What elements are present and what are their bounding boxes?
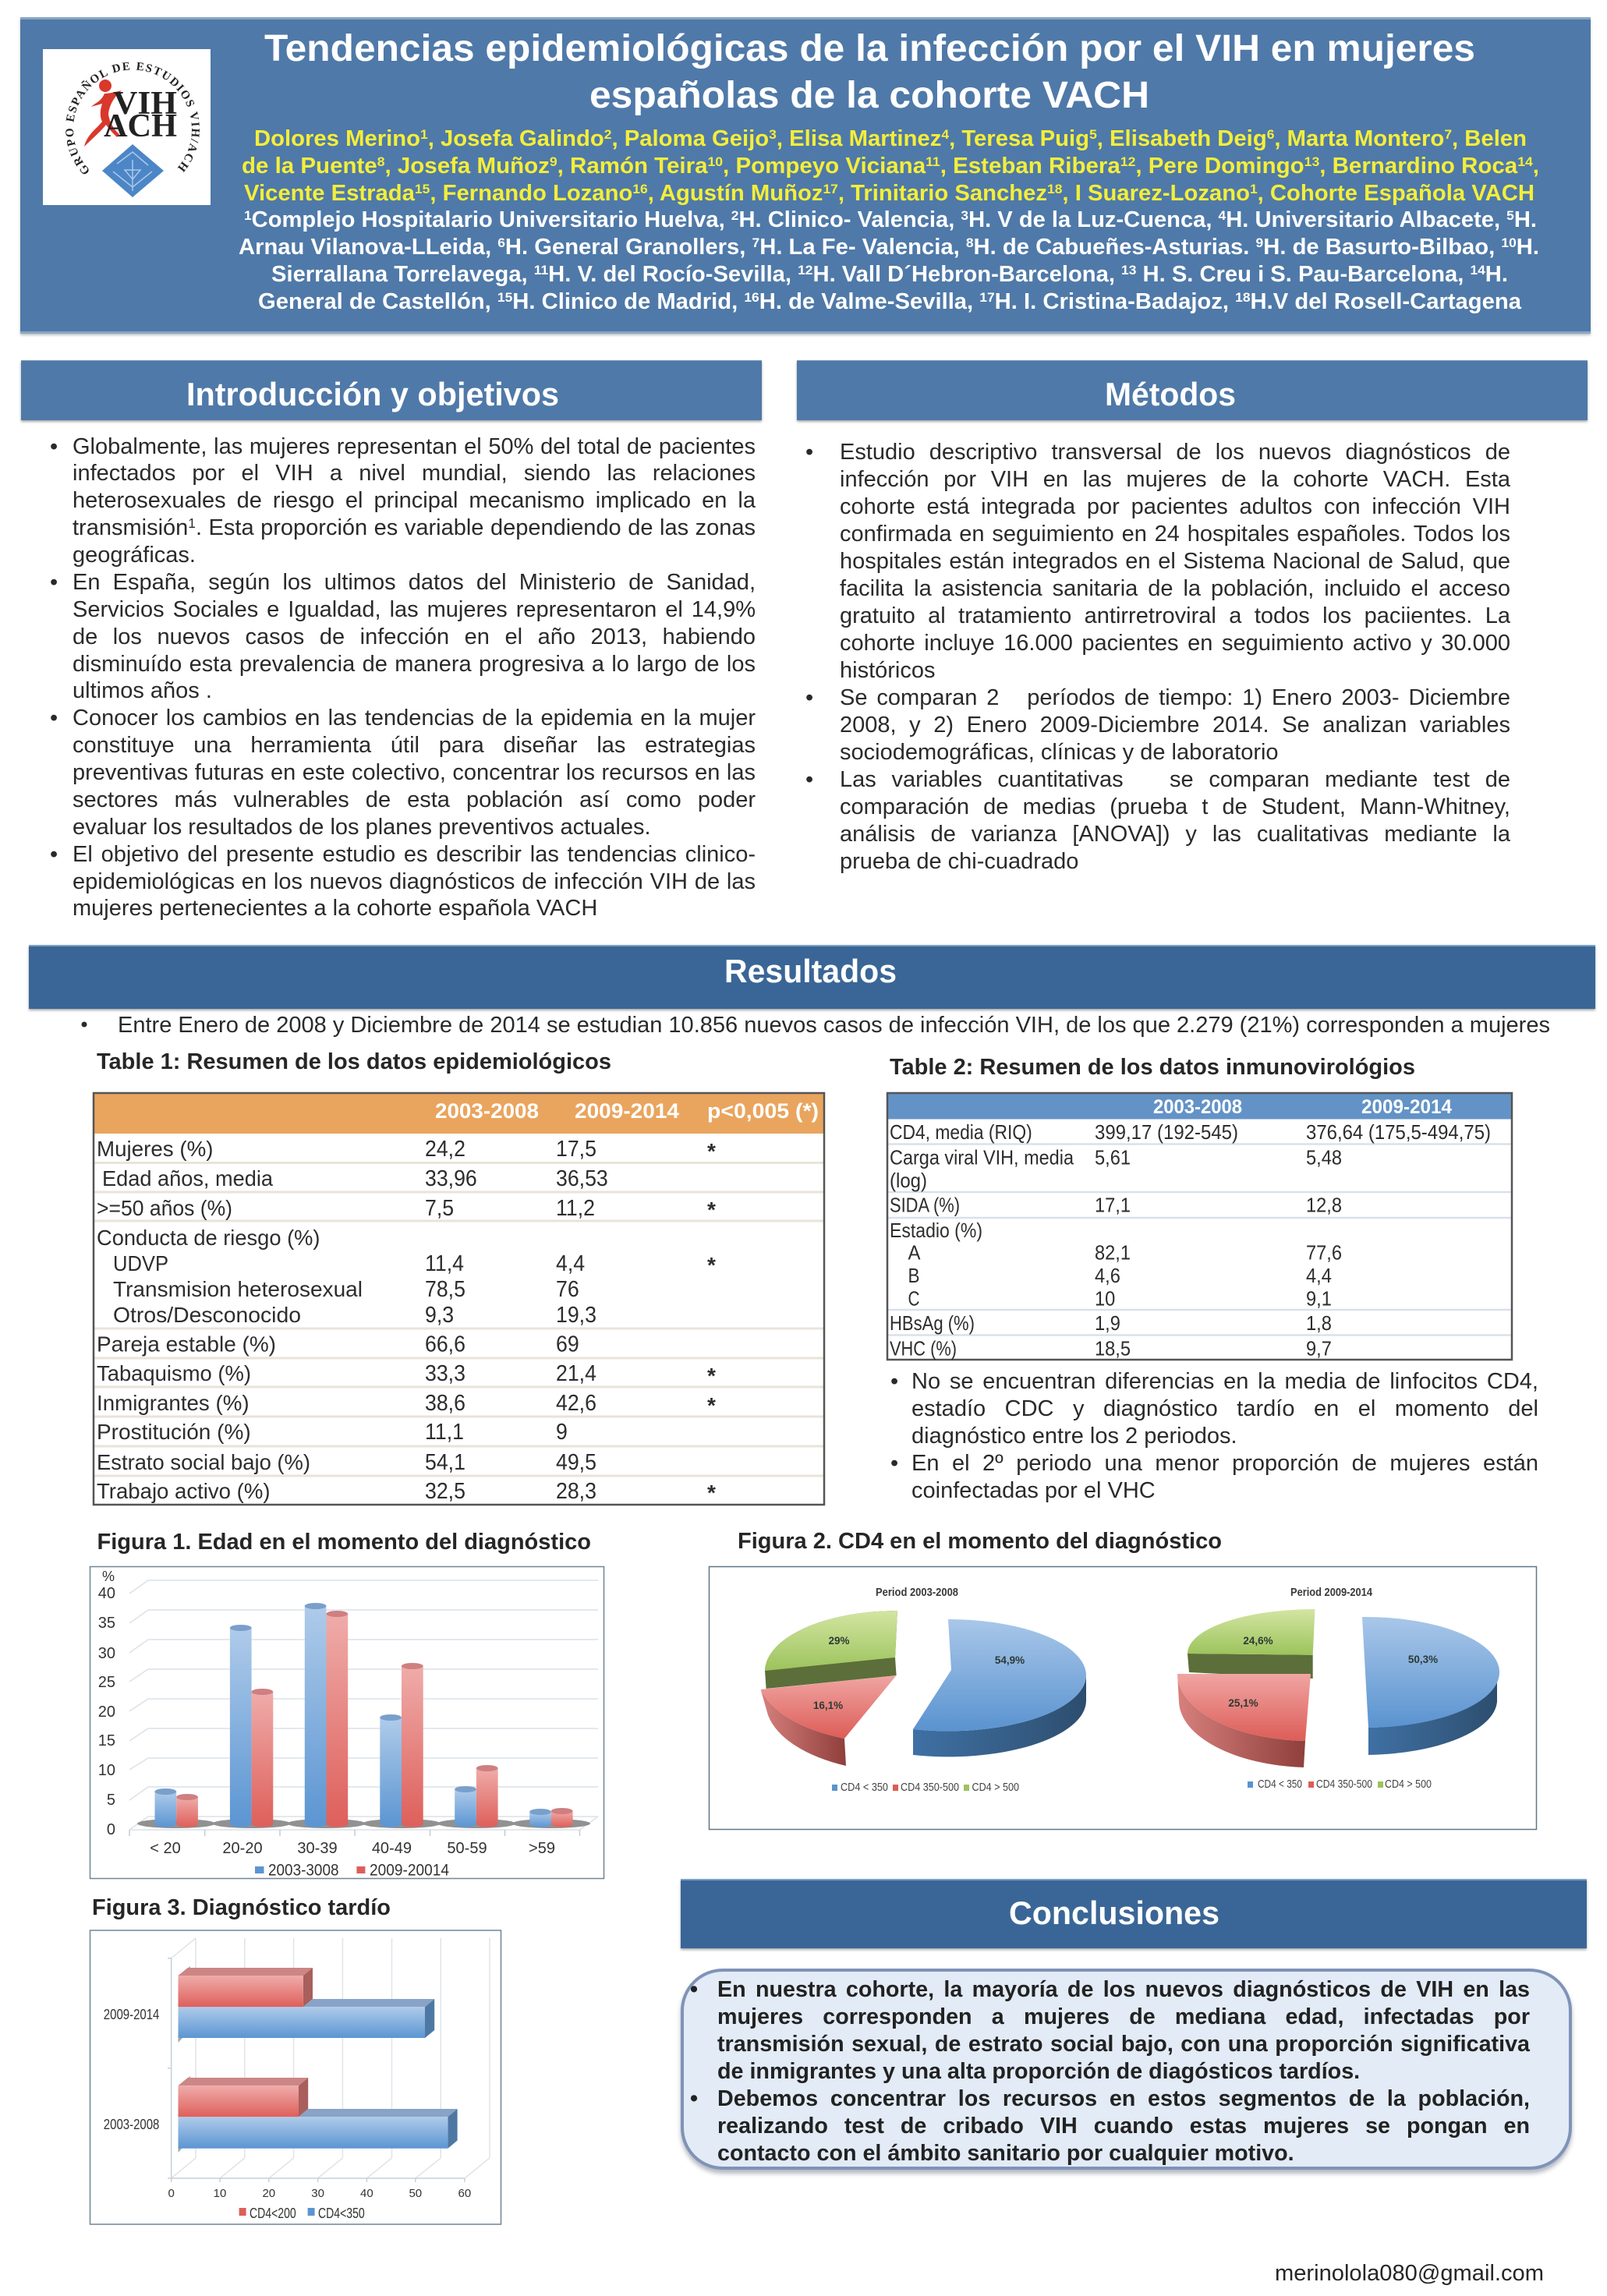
authors: , Josefa Galindo <box>428 126 604 151</box>
table 1: 11,2 <box>556 1195 595 1220</box>
pie: period 2009-2014: CD4 350-500 <box>1316 1778 1372 1791</box>
authors: , Trinitario Sanchez <box>838 181 1047 206</box>
authors: , Paloma Geijo <box>612 126 769 151</box>
affiliations: 12 <box>798 263 813 278</box>
table 2: 399,17 (192-545) <box>1095 1120 1238 1144</box>
title: españolas de la cohorte VACH <box>589 75 1149 116</box>
pie: period 2009-2014: CD4 > 500 <box>1385 1778 1432 1791</box>
text block: conclusiones: de inmigrantes y una alta proporción de diagósticos tardíos. <box>717 2059 1360 2084</box>
authors: , Josefa Muñoz <box>385 154 550 179</box>
table 1: Trabajo activo (%) <box>97 1479 270 1503</box>
table 1: Estrato social bajo (%) <box>97 1450 310 1474</box>
table 2: C <box>908 1287 920 1311</box>
table 2: 9,7 <box>1306 1339 1332 1360</box>
table 1: 33,96 <box>425 1166 477 1190</box>
figure 3 title: Figura 3. Diagnóstico tardío <box>92 1895 391 1920</box>
text: resultados intro: Entre Enero de 2008 y Diciembre de 2014 se estudian 10.856 nuevos casos de infección VIH, de los que 2.279 (21%) corresponden a mujeres <box>118 1013 1550 1038</box>
header panel <box>20 17 1591 334</box>
authors: , Elisa Martinez <box>777 126 941 151</box>
affiliations: H. <box>1517 235 1539 260</box>
affiliations: 5 <box>1506 208 1514 223</box>
axis labels: % <box>102 1569 115 1584</box>
figure 3: horizontal bar chart <box>89 1895 502 2225</box>
table 2: 82,1 <box>1095 1243 1131 1265</box>
table 1 <box>92 1049 825 1506</box>
table 1: Edad años, media <box>102 1166 273 1190</box>
table 2: CD4, media (RIQ) <box>890 1120 1032 1144</box>
table 1: 9 <box>556 1419 568 1444</box>
table 1: Otros/Desconocido <box>113 1303 301 1327</box>
pie: period 2009-2014 <box>1177 1586 1499 1791</box>
figure 1 title: Figura 1. Edad en el momento del diagnóstico <box>97 1530 591 1555</box>
affiliations: 9 <box>1256 235 1263 250</box>
table 2: A <box>908 1241 921 1265</box>
table 1: 4,4 <box>556 1251 585 1275</box>
heading: Resultados: Resultados <box>724 953 897 989</box>
text block: introducción: El objetivo del presente estudio es describir las tendencias clinico- <box>73 842 756 867</box>
affiliations: 6 <box>497 235 505 250</box>
table 1: 66,6 <box>425 1331 465 1357</box>
table 1: 54,1 <box>425 1449 465 1474</box>
table 1: * <box>707 1253 716 1277</box>
text block: introducción: sectores más vulnerables de esta población así como poder <box>73 787 756 812</box>
authors: , Fernando Lozano <box>430 181 632 206</box>
text block: introducción: evaluar los resultados de los planes preventivos actuales. <box>73 815 651 840</box>
text block: conclusiones: realizando test de cribado VIH cuando estas mujeres se pongan en <box>717 2114 1530 2139</box>
authors: 8 <box>377 154 385 169</box>
text block: métodos: hospitales están integrados en el Sistema Nacional de Salud, que <box>840 549 1510 574</box>
logo: GRUPO ESPAÑOL DE ESTUDIOS VIH/ACH <box>65 62 200 175</box>
axis labels: < 20 <box>150 1840 181 1857</box>
text block: introducción: Conocer los cambios en las tendencias de la epidemia en la mujer <box>73 706 756 731</box>
bars 2003-2008 <box>154 1603 551 1827</box>
text block: introducción: de los nuevos casos de infección en el año 2013, habiendo <box>73 624 756 649</box>
pie: period 2003-2008: Period 2003-2008 <box>876 1586 958 1599</box>
axis labels: 35 <box>98 1615 115 1632</box>
text block: introducción: heterosexuales de riesgo el principal mecanismo implicado en la <box>73 488 756 513</box>
table 1: Inmigrantes (%) <box>97 1391 250 1415</box>
table 2: 4,6 <box>1095 1265 1120 1287</box>
heading: Conclusiones: Conclusiones <box>1009 1894 1219 1931</box>
axis labels: 0 <box>107 1821 115 1838</box>
text block: métodos: análisis de varianza [ANOVA]) y las cualitativas mediante la <box>840 822 1510 847</box>
table 1: Conducta de riesgo (%) <box>97 1226 320 1250</box>
affiliations: 13 <box>1121 263 1136 278</box>
text block: introducción: epidemiológicas en los nuevos diagnósticos de infección VIH de las <box>73 869 756 893</box>
affiliations: H. General Granollers, <box>505 235 752 260</box>
table 2: 5,48 <box>1306 1148 1342 1169</box>
axis labels: 30 <box>311 2187 324 2200</box>
table 1: 21,4 <box>556 1360 596 1385</box>
table 1: >=50 años (%) <box>97 1196 232 1220</box>
text block: métodos: sociodemográficas, clínicas y de laboratorio <box>840 739 1279 764</box>
bars period 2003-2008 <box>178 2076 458 2153</box>
affiliations: H. <box>1514 207 1537 232</box>
affiliations: 1 <box>244 208 252 223</box>
text block: introducción: ultimos años . <box>73 678 212 703</box>
pie: period 2003-2008 <box>761 1586 1086 1794</box>
authors: , <box>1533 154 1539 179</box>
authors: 18 <box>1047 182 1062 196</box>
figure 2 title: Figura 2. CD4 en el momento del diagnóstico <box>738 1529 1222 1554</box>
text block: table 2 findings: diagnóstico entre los 2 periodos. <box>911 1424 1237 1449</box>
authors: 11 <box>926 154 940 169</box>
text block: conclusiones: En nuestra cohorte, la mayoría de los nuevos diagnósticos de VIH en las <box>717 1977 1530 2002</box>
figure 2: pie charts <box>708 1529 1538 1831</box>
text block: introducción: transmisión1. Esta proporción es variable dependiendo de las zonas <box>73 515 756 540</box>
affiliations: H. de Cabueñes-Asturias. <box>974 235 1256 260</box>
affiliations: H. La Fe- Valencia, <box>759 235 966 260</box>
affiliations: H. Clinico- Valencia, <box>738 207 961 232</box>
table 1: 11,1 <box>425 1419 464 1444</box>
text block: métodos: facilita la asistencia sanitaria de la población, incluido el acceso <box>840 575 1510 600</box>
affiliations: 2 <box>731 208 738 223</box>
authors: de la Puente <box>242 154 373 179</box>
affiliations: H. Vall D´Hebron-Barcelona, <box>813 262 1121 287</box>
authors: Vicente Estrada <box>244 181 410 206</box>
table 1: * <box>707 1481 716 1505</box>
pie: period 2009-2014: Period 2009-2014 <box>1290 1586 1373 1599</box>
pie: period 2003-2008: 29% <box>828 1635 850 1647</box>
authors: , Teresa Puig <box>949 126 1089 151</box>
text block: métodos: históricos <box>840 658 936 683</box>
authors: , Agustín Muñoz <box>648 181 823 206</box>
text block: métodos: gratuito al tratamiento antirretroviral a todos los paciientes. La <box>840 603 1510 628</box>
legend <box>255 1862 449 1880</box>
table 2: 2009-2014 <box>1361 1096 1452 1118</box>
pie: period 2009-2014: 25,1% <box>1228 1697 1258 1709</box>
authors: , Elisabeth Deig <box>1097 126 1267 151</box>
heading: Resultados <box>29 945 1595 1009</box>
axis labels: 40 <box>98 1585 115 1602</box>
table 1: Transmision heterosexual <box>113 1277 363 1301</box>
text block: conclusiones <box>691 1977 1530 2166</box>
pie: period 2003-2008: 16,1% <box>813 1700 843 1711</box>
axis labels: 20-20 <box>222 1840 263 1857</box>
authors: 13 <box>1304 154 1319 169</box>
table 1: 78,5 <box>425 1276 465 1301</box>
text block: table 2 findings: No se encuentran diferencias en la media de linfocitos CD4, <box>911 1369 1538 1394</box>
text block: métodos: cohorte está integrada por pacientes adultos con infección VIH <box>840 494 1510 519</box>
table 2: (log) <box>890 1169 927 1192</box>
table 2: VHC (%) <box>890 1336 957 1360</box>
table 1: Tabaquismo (%) <box>97 1361 251 1385</box>
axis labels: 10 <box>98 1762 115 1779</box>
axis labels: 25 <box>98 1674 115 1691</box>
affiliations: 14 <box>1470 263 1485 278</box>
affiliations: 8 <box>966 235 974 250</box>
affiliations: H. I. Cristina-Badajoz, <box>995 289 1235 314</box>
pie: period 2009-2014: 24,6% <box>1243 1635 1273 1647</box>
authors: 12 <box>1120 154 1135 169</box>
heading: Introducción y objetivos <box>21 360 762 420</box>
authors: 6 <box>1267 127 1274 142</box>
affiliations: H. <box>1485 262 1508 287</box>
text block: métodos: prueba de chi-cuadrado <box>840 848 1078 873</box>
affiliations: 4 <box>1219 208 1226 223</box>
table 1: 7,5 <box>425 1195 454 1220</box>
axis labels: 60 <box>458 2187 471 2200</box>
table 1: 24,2 <box>425 1136 465 1161</box>
text block: introducción: Servicios Sociales e Igualdad, las mujeres representaron el 14,9% <box>73 597 756 622</box>
table 1: 2003-2008 <box>435 1099 539 1123</box>
title: Tendencias epidemiológicas de la infección por el VIH en mujeres <box>264 28 1475 69</box>
text block: conclusiones: contacto con el ámbito sanitario por cualquier motivo. <box>717 2141 1294 2166</box>
affiliations: 11 <box>534 263 548 278</box>
text block: introducción <box>51 433 756 921</box>
heading: Métodos: Métodos <box>1105 376 1236 412</box>
table 1: 19,3 <box>556 1302 596 1327</box>
table 2 <box>886 1055 1513 1361</box>
affiliations: 17 <box>979 290 995 305</box>
table 1: Mujeres (%) <box>97 1137 214 1161</box>
axis labels: 2003-2008 <box>104 2117 159 2132</box>
pie: period 2009-2014: 50,3% <box>1408 1654 1438 1665</box>
table 2: SIDA (%) <box>890 1194 960 1217</box>
table 1: 33,3 <box>425 1360 465 1385</box>
axis labels: 5 <box>107 1792 115 1809</box>
text block: métodos: 2008, y 2) Enero 2009-Diciembre 2014. Se analizan variables <box>840 713 1510 738</box>
text block: table 2 findings: estadío CDC y diagnóstico tardío en el momento del <box>911 1396 1538 1420</box>
affiliations: Arnau Vilanova-LLeida, <box>239 235 485 260</box>
header text <box>239 28 1539 314</box>
axis labels: 40 <box>360 2187 373 2200</box>
text block: introducción: infectados por el VIH a nivel mundial, siendo las relaciones <box>73 461 756 486</box>
text block: introducción: mujeres pertenecientes a la cohorte española VACH <box>73 896 597 921</box>
authors: , Pere Domingo <box>1135 154 1304 179</box>
text block: métodos: Las variables cuantitativas se comparan mediante test de <box>840 767 1510 792</box>
table 2: 5,61 <box>1095 1148 1131 1169</box>
axis labels: 20 <box>98 1703 115 1721</box>
table 2: 1,8 <box>1306 1313 1332 1335</box>
authors: 5 <box>1089 127 1097 142</box>
table 1: 38,6 <box>425 1390 465 1415</box>
affiliations: Complejo Hospitalario Universitario Huelva, <box>252 207 731 232</box>
authors: 1 <box>1250 182 1258 196</box>
authors: 1 <box>420 127 428 142</box>
table 2: 1,9 <box>1095 1313 1120 1335</box>
table 1: 17,5 <box>556 1136 596 1161</box>
text block: métodos: confirmada en seguimiento en 24 hospitales españoles. Todos los <box>840 521 1510 546</box>
axis labels <box>98 1569 555 1857</box>
affiliations: Sierrallana Torrelavega, <box>271 262 522 287</box>
affiliations: General de Castellón, <box>258 289 485 314</box>
table 1: * <box>707 1198 716 1222</box>
table 2: 4,4 <box>1306 1265 1332 1287</box>
text block: métodos: cohorte incluye 16.000 pacientes en seguimiento activo y 30.000 <box>840 630 1510 655</box>
legend: CD4<350 <box>318 2206 365 2221</box>
authors: , Bernardino Roca <box>1319 154 1518 179</box>
affiliations <box>239 207 1539 314</box>
affiliations: 3 <box>961 208 968 223</box>
authors: , Belen <box>1452 126 1527 151</box>
logo: ACH <box>104 108 177 144</box>
table 1: 49,5 <box>556 1449 596 1474</box>
bars period 2009-2014 <box>178 1966 434 2043</box>
text block: table 2 findings <box>891 1369 1538 1503</box>
text block: introducción: preventivas futuras en este colectivo, concentrar los recursos en las <box>73 760 756 785</box>
text block: introducción: En España, según los ultimos datos del Ministerio de Sanidad, <box>73 570 756 595</box>
bars 2009-2014 <box>176 1611 573 1827</box>
legend: CD4<200 <box>250 2206 296 2221</box>
authors: , Esteban Ribera <box>940 154 1121 179</box>
authors: 15 <box>415 182 430 196</box>
affiliations: H. de Basurto-Bilbao, <box>1263 235 1501 260</box>
affiliations: H. Clinico de Madrid, <box>512 289 744 314</box>
figure 1: bar chart <box>89 1530 605 1880</box>
text block: introducción: geográficas. <box>73 543 196 568</box>
table 1: 9,3 <box>425 1302 454 1327</box>
axis labels: 2009-2014 <box>104 2007 159 2022</box>
affiliations: 7 <box>752 235 759 250</box>
authors: 10 <box>707 154 723 169</box>
table 2: 2003-2008 <box>1153 1096 1242 1118</box>
table 2: 17,1 <box>1095 1195 1131 1217</box>
table 2: 10 <box>1095 1289 1115 1311</box>
affiliations: H. de Valme-Sevilla, <box>759 289 979 314</box>
table 1: * <box>707 1364 716 1388</box>
text block: métodos: comparación de medias (prueba t de Student, Mann-Whitney, <box>840 794 1510 819</box>
axis labels: 50-59 <box>447 1840 487 1857</box>
authors: 9 <box>550 154 557 169</box>
pie: period 2003-2008: 54,9% <box>995 1654 1025 1666</box>
affiliations: H.V del Rosell-Cartagena <box>1251 289 1522 314</box>
text block: table 2 findings: coinfectadas por el VHC <box>911 1478 1156 1503</box>
heading: Métodos <box>797 360 1588 420</box>
title <box>264 28 1475 116</box>
axis labels: 40-49 <box>372 1840 412 1857</box>
authors: , Ramón Teira <box>557 154 709 179</box>
legend: 2003-3008 <box>268 1862 338 1880</box>
table 1: * <box>707 1393 716 1417</box>
heading: Conclusiones <box>681 1879 1587 1948</box>
axis labels: 10 <box>214 2187 226 2200</box>
callout: conclusiones <box>681 1969 1572 2170</box>
axis labels: >59 <box>529 1840 555 1857</box>
base shadows <box>137 1819 590 1828</box>
affiliations: 16 <box>744 290 759 305</box>
table 2: Carga viral VIH, media <box>890 1146 1074 1169</box>
authors: 2 <box>604 127 612 142</box>
text block: métodos: Se comparan 2 períodos de tiempo: 1) Enero 2003- Diciembre <box>840 685 1510 709</box>
table 1: * <box>707 1139 716 1163</box>
text block: introducción: constituye una herramienta útil para diseñar las estrategias <box>73 733 756 758</box>
affiliations: H. S. Creu i S. Pau-Barcelona, <box>1136 262 1470 287</box>
affiliations: 10 <box>1501 235 1517 250</box>
table 2: Estadio (%) <box>890 1219 982 1242</box>
authors: 17 <box>823 182 838 196</box>
axis labels: 20 <box>262 2187 275 2200</box>
text block: conclusiones: mujeres corresponden a mujeres de mediana edad, infectadas por <box>717 2004 1530 2029</box>
axis labels: 50 <box>409 2187 422 2200</box>
table 1: 42,6 <box>556 1390 596 1415</box>
table 2: 18,5 <box>1095 1339 1131 1360</box>
heading: Introducción y objetivos: Introducción y objetivos <box>186 376 559 412</box>
authors: , I Suarez-Lozano <box>1062 181 1250 206</box>
table 2: 9,1 <box>1306 1289 1332 1311</box>
axis labels: 30-39 <box>297 1840 338 1857</box>
table 1: 28,3 <box>556 1478 596 1503</box>
authors: Dolores Merino <box>254 126 416 151</box>
table 2 title: Table 2: Resumen de los datos inmunovirológios <box>890 1055 1415 1080</box>
authors: 7 <box>1444 127 1452 142</box>
authors: 3 <box>769 127 777 142</box>
text block: introducción: Globalmente, las mujeres representan el 50% del total de pacientes <box>73 433 756 458</box>
email: merinolola080@gmail.com <box>1275 2261 1544 2286</box>
authors: 16 <box>632 182 648 196</box>
text block: conclusiones: Debemos concentrar los recursos en estos segmentos de la población, <box>717 2086 1530 2111</box>
axis labels: 0 <box>168 2187 175 2200</box>
text block: métodos <box>806 440 1510 873</box>
table 1: 32,5 <box>425 1478 465 1503</box>
axis labels <box>104 2007 471 2200</box>
authors: 14 <box>1517 154 1533 169</box>
text block: introducción: disminuído esta prevalencia de manera progresiva a lo largo de los <box>73 652 756 677</box>
table 1: 76 <box>556 1276 579 1301</box>
text block: métodos: Estudio descriptivo transversal de los nuevos diagnósticos de <box>840 440 1510 465</box>
table 1: 69 <box>556 1331 579 1357</box>
text block: table 2 findings: En el 2º periodo una menor proporción de mujeres están <box>911 1450 1538 1475</box>
authors: , Cohorte Española VACH <box>1258 181 1534 206</box>
affiliations: 15 <box>497 290 512 305</box>
table 1 title: Table 1: Resumen de los datos epidemiológicos <box>97 1049 611 1074</box>
legend <box>239 2206 365 2221</box>
table 1: 36,53 <box>556 1166 608 1190</box>
pie: period 2009-2014: CD4 < 350 <box>1258 1778 1302 1791</box>
pie: period 2003-2008: CD4 < 350 <box>841 1781 888 1794</box>
logo: VIH <box>113 86 177 122</box>
legend: 2009-20014 <box>370 1862 449 1880</box>
table 1: p<0,005 (*) <box>707 1099 819 1123</box>
text block: conclusiones: transmisión sexual, de estrato social bajo, con una proporción significativa <box>717 2032 1530 2057</box>
authors: , Marta Montero <box>1274 126 1444 151</box>
authors <box>242 126 1539 206</box>
text block: métodos: infección por VIH en las mujeres de la cohorte VACH. Esta <box>840 466 1510 491</box>
affiliations: H. Universitario Albacete, <box>1226 207 1506 232</box>
table 2: HBsAg (%) <box>890 1311 975 1335</box>
pie: period 2003-2008: CD4 350-500 <box>901 1781 959 1794</box>
table 1: Pareja estable (%) <box>97 1332 276 1357</box>
affiliations: H. V. del Rocío-Sevilla, <box>548 262 798 287</box>
axis labels: 15 <box>98 1732 115 1749</box>
table 1: Prostitución (%) <box>97 1420 251 1444</box>
axis labels: 30 <box>98 1645 115 1662</box>
affiliations: 18 <box>1235 290 1251 305</box>
authors: , Pompeyo Viciana <box>723 154 926 179</box>
table 2: 77,6 <box>1306 1243 1342 1265</box>
table 1: 2009-2014 <box>575 1099 679 1123</box>
pie: period 2003-2008: CD4 > 500 <box>972 1781 1019 1794</box>
affiliations: H. V de la Luz-Cuenca, <box>968 207 1219 232</box>
table 2: 376,64 (175,5-494,75) <box>1306 1120 1491 1144</box>
table 2: B <box>908 1264 920 1287</box>
authors: 4 <box>941 127 950 142</box>
table 1: UDVP <box>113 1251 168 1275</box>
logo <box>43 49 211 205</box>
table 2: 12,8 <box>1306 1195 1342 1217</box>
table 1: 11,4 <box>425 1251 464 1275</box>
